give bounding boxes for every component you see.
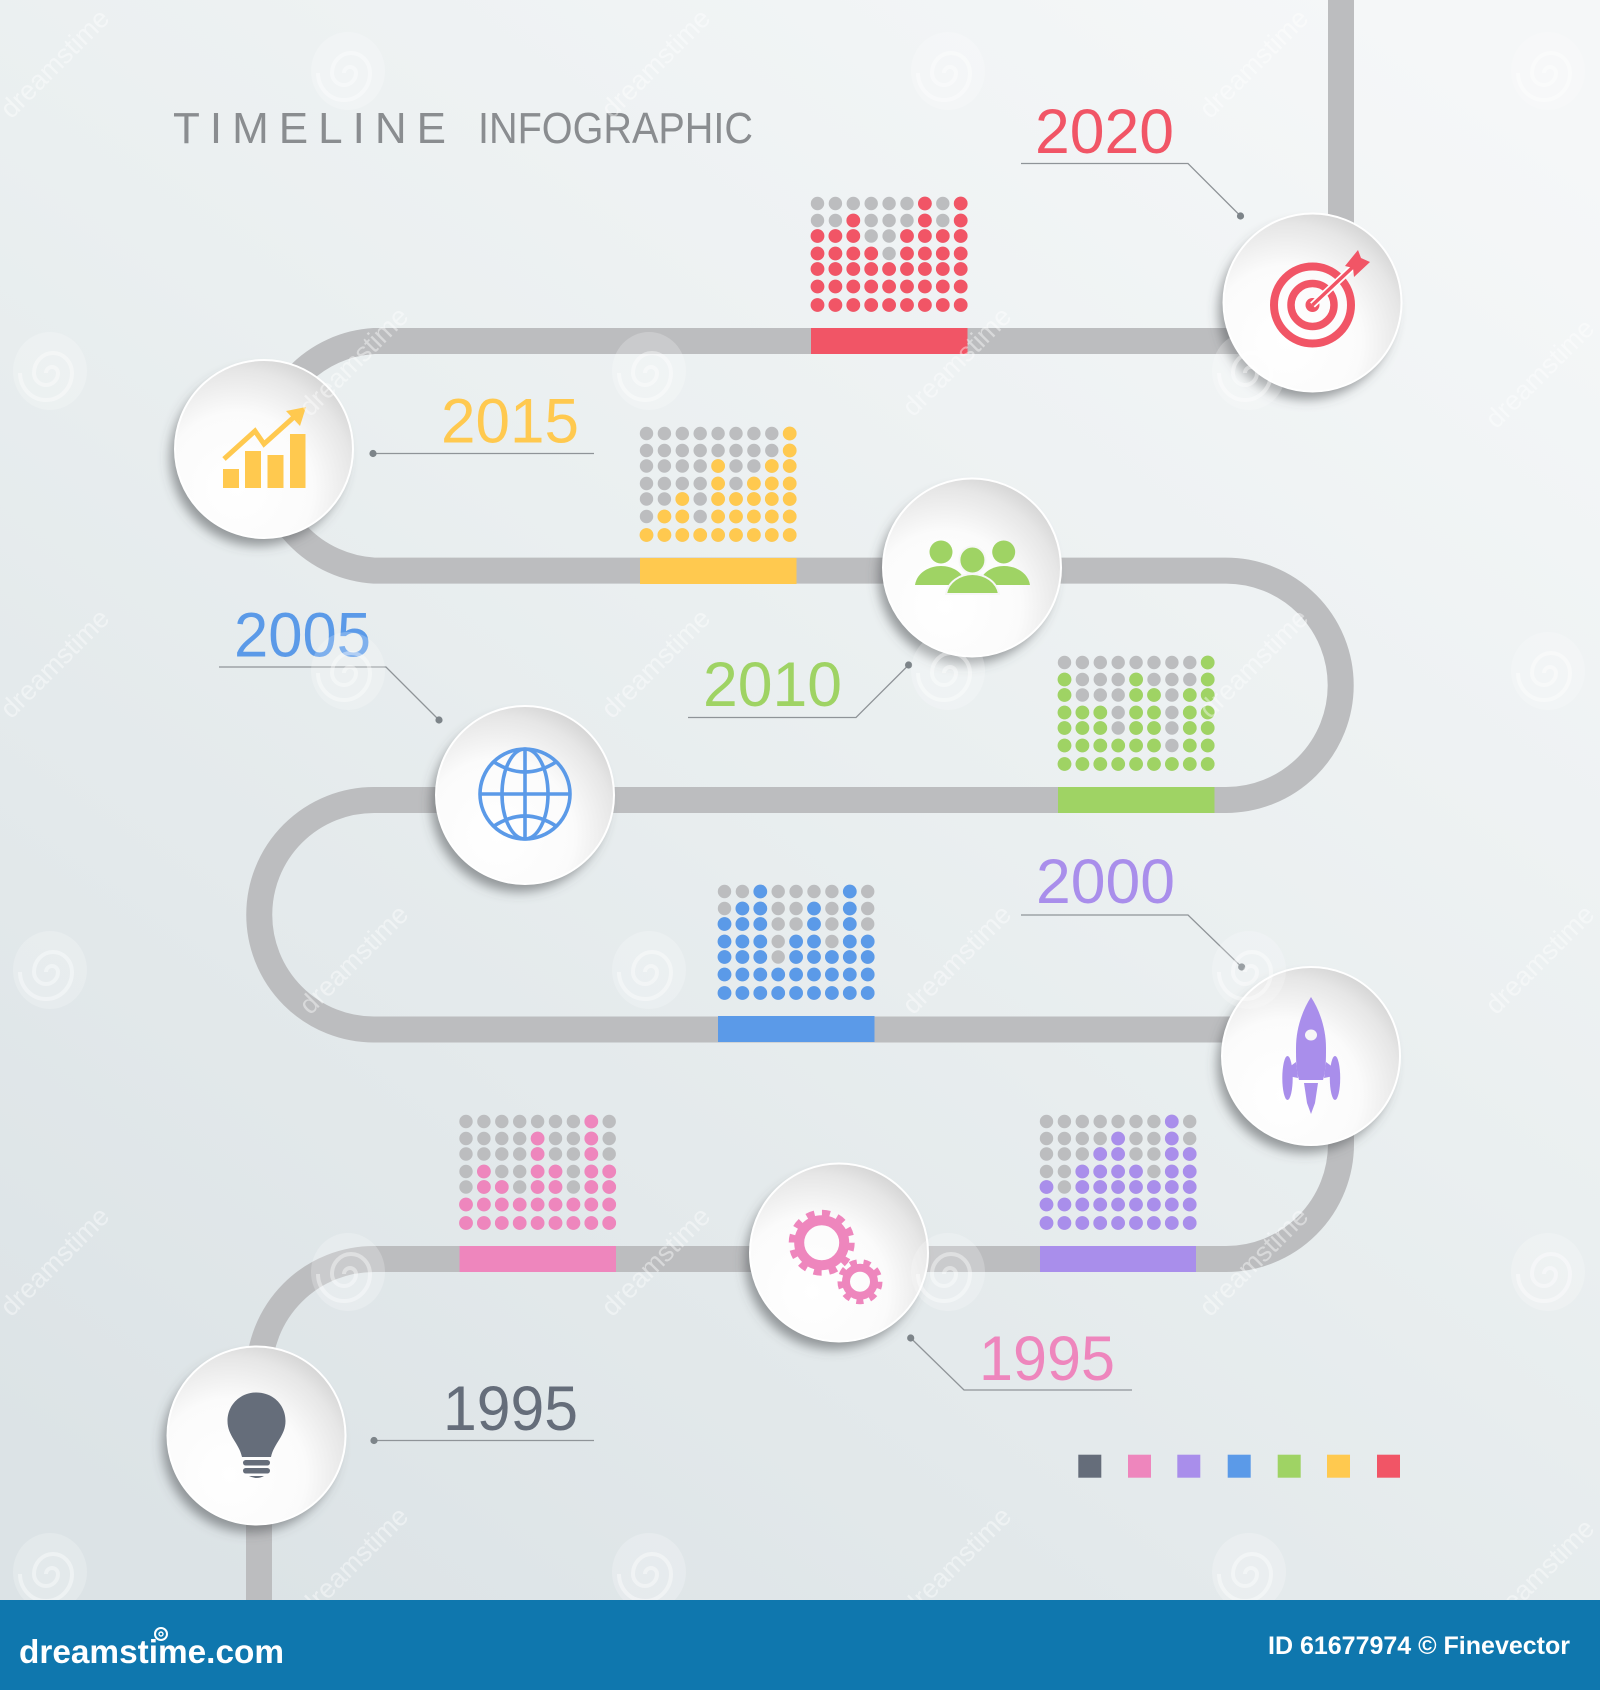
milestone: globe	[431, 706, 614, 892]
label: 2015	[369, 386, 594, 457]
label: 2015: 2015	[441, 386, 579, 456]
milestone: light bulb	[162, 1346, 346, 1532]
label: 1995 pink: 1995	[979, 1324, 1115, 1394]
milestone: gears	[745, 1164, 928, 1350]
icon: light bulb	[228, 1392, 286, 1478]
icon: globe	[480, 749, 570, 839]
footer logo: dreamstime.com	[19, 1633, 284, 1670]
watermark text: dreamstime	[896, 899, 1017, 1020]
label: 2010: 2010	[703, 650, 842, 720]
milestone: people	[878, 478, 1061, 664]
milestone: rocket	[1217, 967, 1400, 1153]
label: 1995 dark	[370, 1374, 594, 1444]
watermark text: dreamstime	[595, 603, 716, 724]
title	[173, 104, 753, 153]
watermark text: dreamstime	[1193, 3, 1314, 124]
dot grid and bar: red	[811, 204, 968, 354]
icon: growth chart	[223, 407, 306, 488]
watermark text: dreamstime	[1193, 603, 1314, 724]
title: INFOGRAPHIC	[478, 104, 753, 153]
watermark text: dreamstime	[293, 899, 414, 1020]
milestone: chart	[170, 360, 353, 546]
label: 2005	[219, 600, 443, 724]
footer credit: ID 61677974 © Finevector	[1268, 1632, 1570, 1660]
winding road	[259, 0, 1341, 1600]
watermark text: dreamstime	[595, 1201, 716, 1322]
watermark text: dreamstime	[1479, 313, 1600, 434]
watermark text: dreamstime	[896, 301, 1017, 422]
title: TIMELINE	[173, 104, 446, 153]
watermark text: dreamstime	[1479, 899, 1600, 1020]
icon: target	[1274, 250, 1370, 344]
label: 2000	[1021, 847, 1245, 971]
label: 2000: 2000	[1036, 847, 1175, 917]
label: 1995 dark: 1995	[443, 1374, 578, 1444]
dot grid and bar: yellow	[640, 434, 796, 584]
watermark text: dreamstime	[1479, 1513, 1600, 1634]
label: 2020	[1021, 97, 1244, 220]
watermark text: dreamstime	[293, 1501, 414, 1622]
watermark text: dreamstime	[896, 1501, 1017, 1622]
footer bar	[0, 1600, 1600, 1690]
dot grid and bar: pink	[460, 1122, 616, 1272]
label: 2005: 2005	[234, 600, 371, 670]
watermark text: dreamstime	[595, 3, 716, 124]
colour legend	[1078, 1455, 1400, 1478]
icon: people	[915, 540, 1030, 594]
dot grid and bar: purple	[1040, 1122, 1196, 1272]
dot grid and bar: green	[1058, 662, 1214, 813]
label: 2020: 2020	[1035, 97, 1174, 167]
dot grid and bar: blue	[718, 892, 874, 1042]
watermark text: dreamstime	[293, 301, 414, 422]
label: 2010	[688, 650, 912, 720]
watermark text: dreamstime	[1193, 1201, 1314, 1322]
milestone: target	[1218, 214, 1402, 400]
label: 1995 pink	[907, 1324, 1132, 1394]
icon: gears	[792, 1213, 880, 1301]
icon: rocket	[1282, 997, 1340, 1114]
